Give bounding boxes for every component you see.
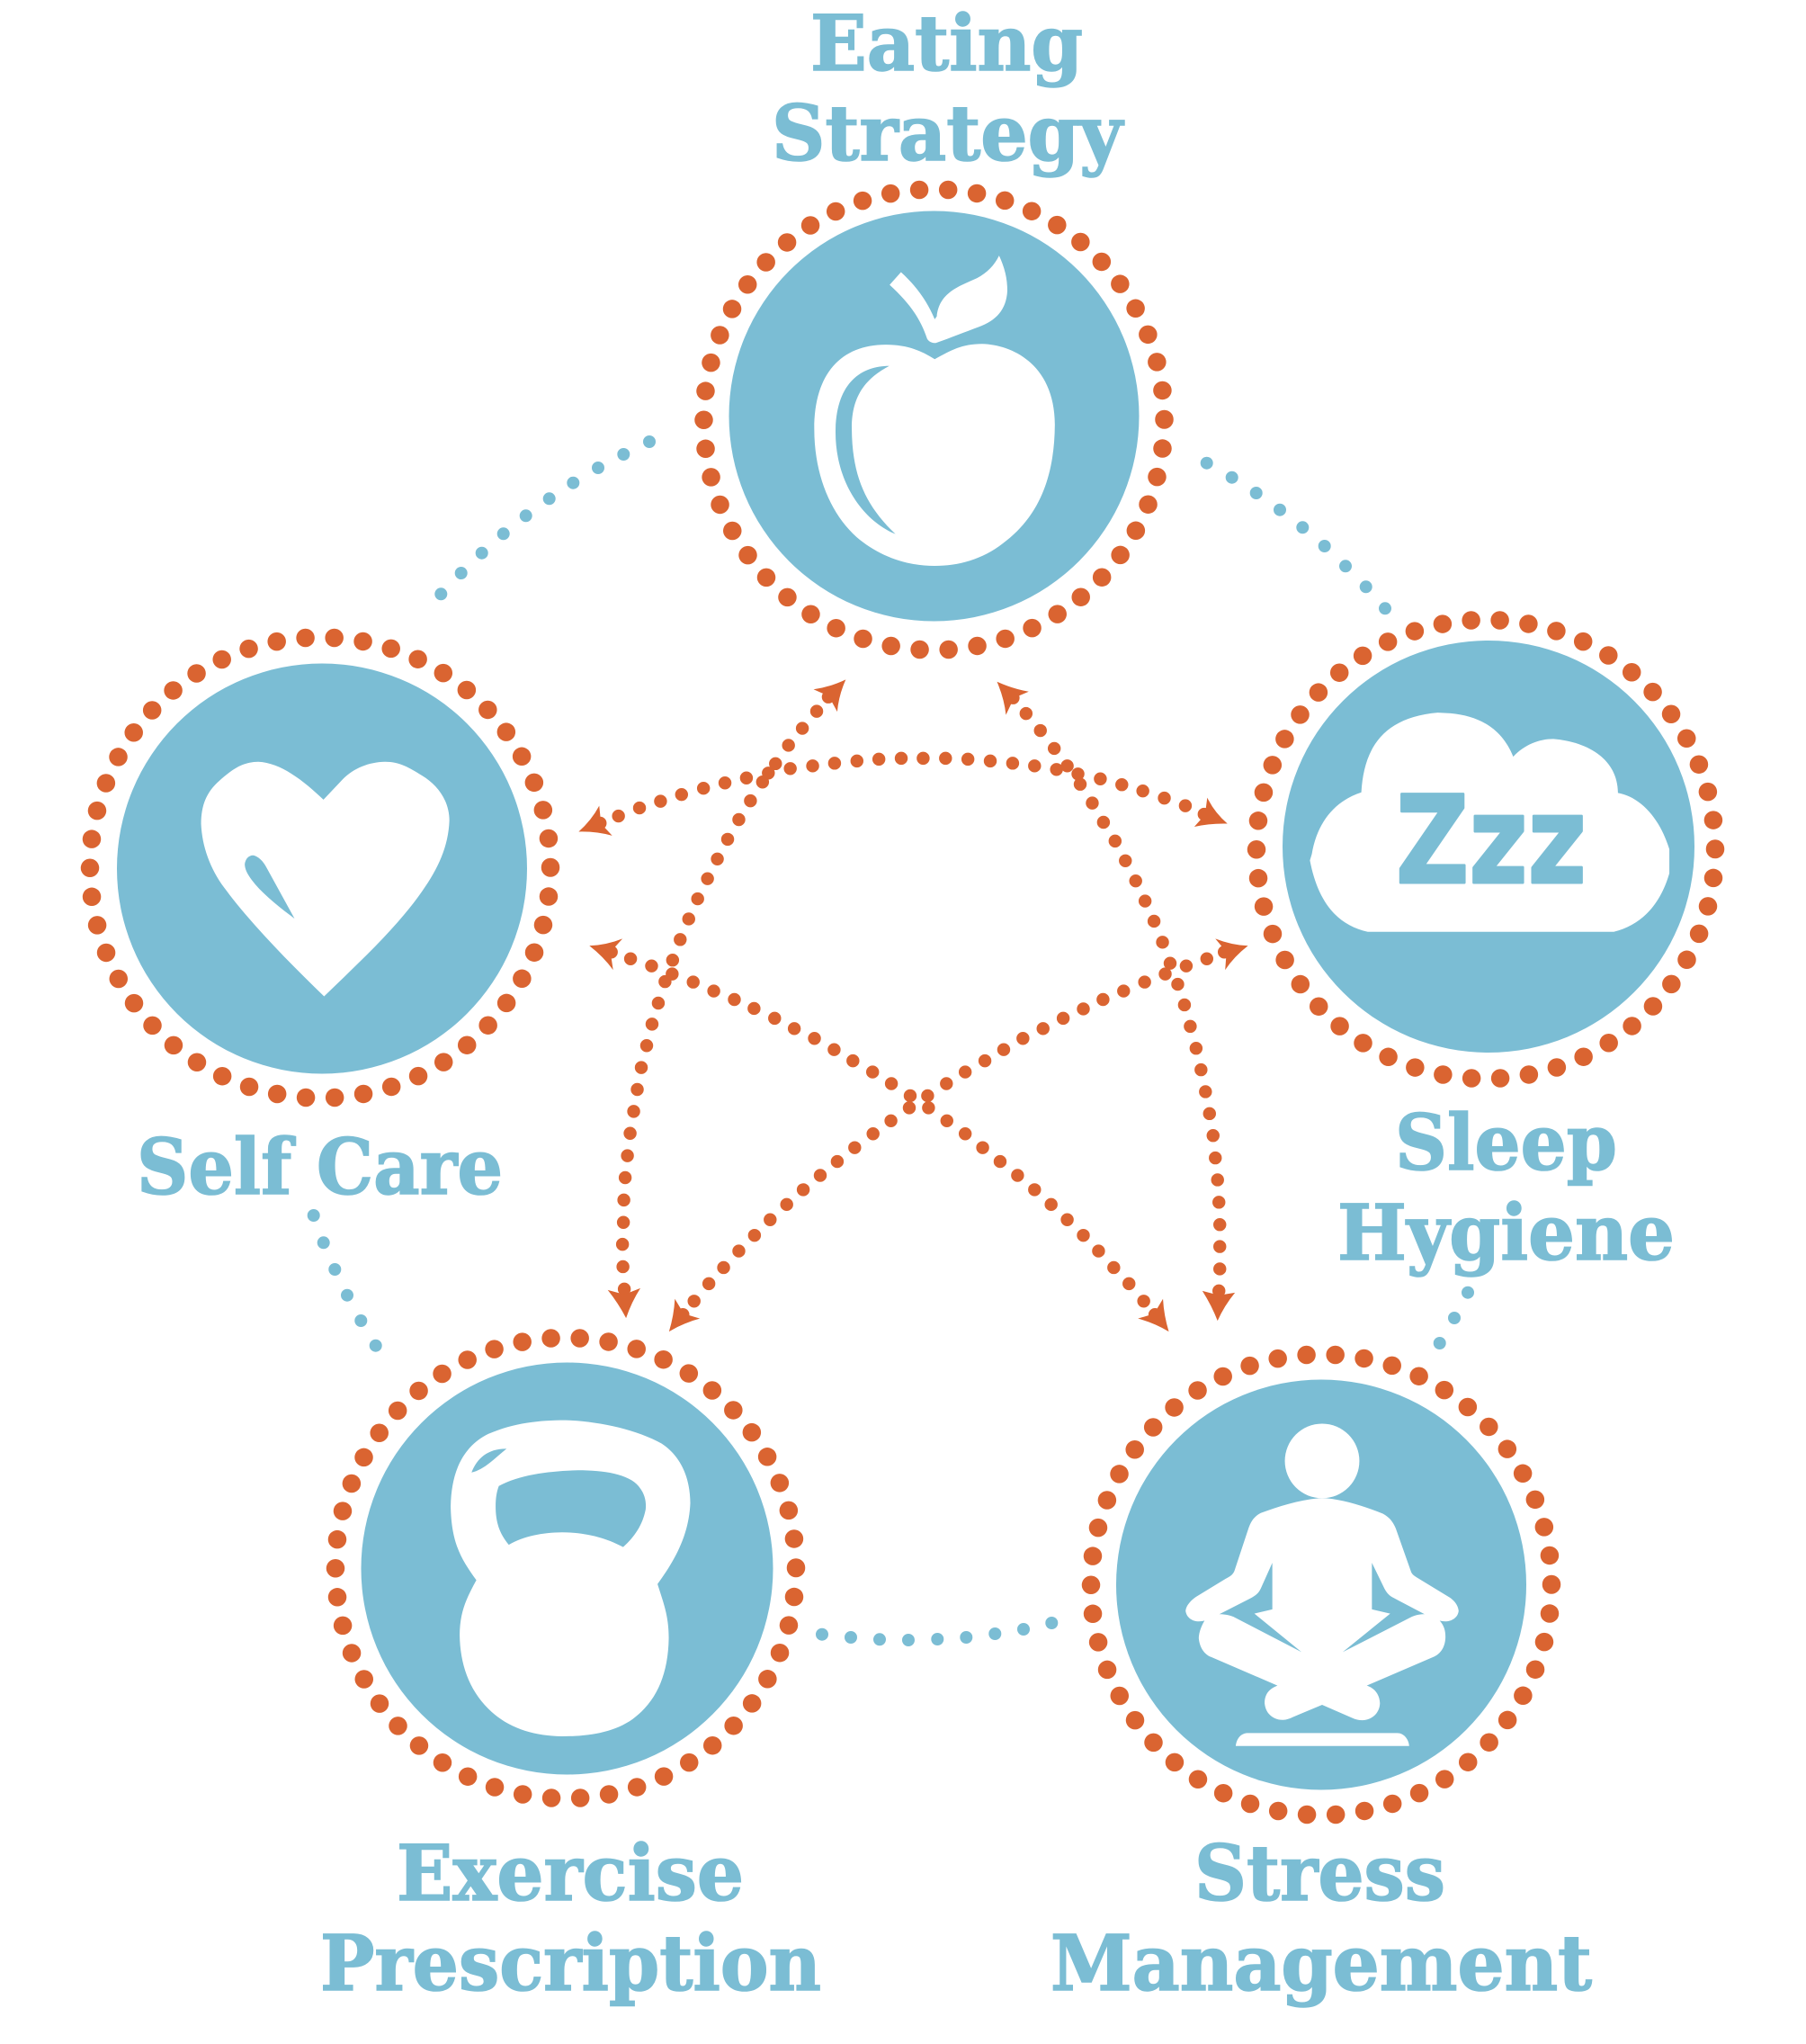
arrow: eating to exercise curve (608, 679, 845, 1318)
icon: kettlebell (451, 1421, 690, 1736)
disc: self care (117, 664, 527, 1074)
panel: sleep hygiene (1256, 620, 1715, 1278)
icon: apple (814, 256, 1055, 566)
panel: eating strategy (703, 0, 1164, 650)
panel: self care (90, 637, 550, 1213)
dotted ring: stress (1091, 1355, 1551, 1815)
heading: eating strategy: Eating (810, 0, 1083, 89)
panel: stress management (1051, 1355, 1592, 2009)
heading: self care: Self Care (137, 1123, 503, 1213)
disc: exercise (362, 1362, 773, 1774)
heading: stress management (1051, 1829, 1592, 2009)
dotted ring: sleep (1256, 620, 1715, 1079)
orange dotted arrows between goals (578, 679, 1248, 1331)
icon: cloud with Zzz (1310, 713, 1669, 932)
blue dotted link: sleep to stress (1440, 1293, 1468, 1343)
heading: exercise prescription (320, 1829, 821, 2009)
blue dotted link: self care to eating (441, 442, 649, 594)
icon: heart (201, 762, 450, 996)
heading: eating strategy: Strategy (772, 89, 1125, 179)
heading: stress management: Stress (1194, 1829, 1445, 1919)
dotted ring: exercise (335, 1338, 796, 1798)
heading: sleep hygiene: Sleep (1395, 1098, 1617, 1188)
panel: exercise prescription (320, 1338, 821, 2009)
arrow: self care to stress diagonal (589, 938, 1169, 1331)
heading: exercise prescription: Exercise (397, 1829, 744, 1919)
disc: eating (729, 211, 1139, 621)
heading: sleep hygiene (1337, 1098, 1675, 1278)
blue dotted link: exercise to stress (822, 1623, 1051, 1640)
icon: meditating figure (1185, 1423, 1459, 1746)
heading: sleep hygiene: Hygiene (1337, 1188, 1675, 1278)
dotted ring: self care (90, 637, 550, 1098)
disc: stress (1116, 1380, 1526, 1790)
heading: stress management: Management (1051, 1919, 1592, 2009)
arrow: sleep to exercise diagonal (669, 938, 1248, 1331)
heading: exercise prescription: Prescription (320, 1919, 821, 2009)
heading: eating strategy (772, 0, 1125, 179)
blue dotted link: self care to exercise (314, 1215, 376, 1346)
blue dotted link: eating to sleep (1207, 463, 1385, 608)
dotted ring: eating (703, 189, 1164, 650)
arrow: eating to stress curve (997, 682, 1235, 1321)
arrow: self care to sleep arc (578, 758, 1228, 836)
disc: sleep (1283, 641, 1694, 1053)
icon: cloud with Zzz: Zzz (1396, 770, 1587, 911)
